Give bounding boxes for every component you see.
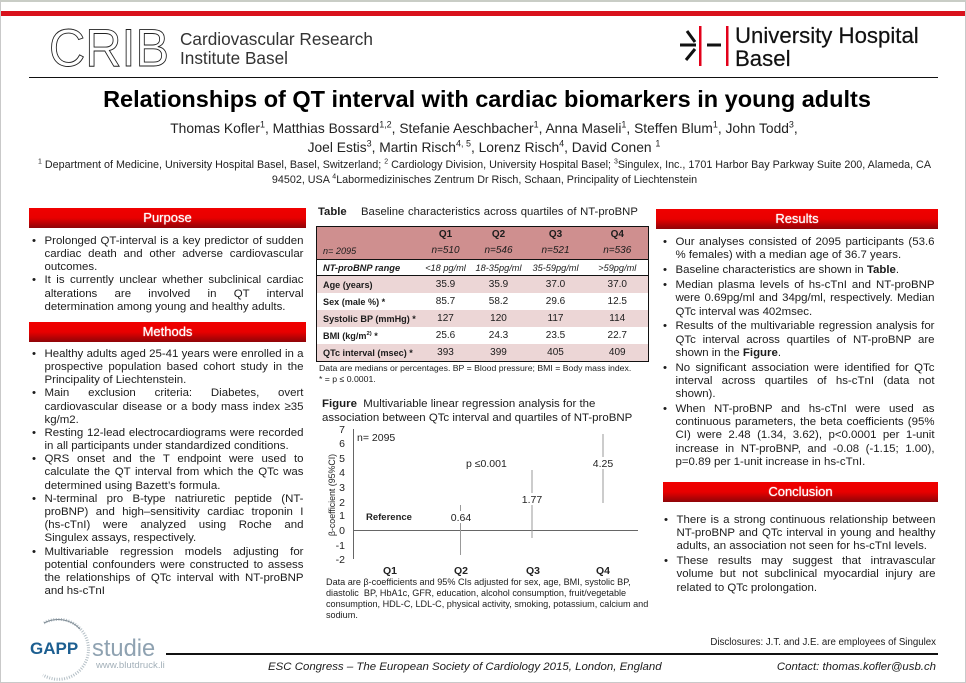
y tick labels: -2 [336,554,345,566]
chart: regression coefficients by quartile: 4.25 [593,458,613,470]
logo: GAPP studie [30,618,165,681]
table note: Data are medians or percentages. BP = Blood pressure; BMI = Body mass index. [319,363,631,373]
text: Conclusion: There is a strong continuous relationship between [676,514,936,526]
table: baseline characteristics: 120 [490,312,507,324]
table: baseline characteristics: Age (years) [323,280,373,290]
title: Relationships of QT interval with cardiac biomarkers in young adults [103,86,871,112]
heading: Methods: Methods [143,324,192,339]
figure note: diastolic BP, HbA1c, GFR, education, alcohol consumption, fruit/vegetable [326,588,626,598]
affiliations: 1 Department of Medicine, University Hospital Basel, Basel, Switzerland; 2 Cardiology Division, University Hospital Basel; 3Singulex, Inc., 1701 Harbor Bay Parkway Suite 200, Alameda, CA [38,158,931,171]
conference: ESC Congress – The European Society of Cardiology 2015, London, England [268,661,662,673]
logo: University Hospital Basel: University Hospital [735,23,919,48]
logo: University Hospital Basel [680,23,919,71]
y tick labels: 1 [339,510,345,522]
text: Purpose: outcomes. [44,261,97,273]
authors: Joel Estis3, Martin Risch4, 5, Lorenz Risch4, David Conen 1 [308,138,660,155]
authors [170,119,798,155]
table note [319,363,631,384]
text: Methods: Singulex assays, respectively. [44,532,196,544]
quartile labels: Q4 [596,565,610,577]
table: baseline characteristics: n=536 [603,245,631,256]
text: Methods: Resting 12-lead electrocardiograms were recorded [44,427,304,439]
table: baseline characteristics: 399 [490,346,507,358]
table: baseline characteristics: Q3 [549,229,562,240]
text: Methods: the relationships of QTc interval with NT-proBNP [44,572,304,584]
text: Methods [32,348,304,597]
text: Conclusion: adults, an association not seen for hs-cTnI levels. [676,540,927,552]
table caption: Table [318,206,347,218]
text: Results [663,236,934,468]
chart: regression coefficients by quartile [327,424,638,577]
table: baseline characteristics: >59pg/ml [598,262,636,272]
chart: regression coefficients by quartile: 1.77 [522,494,542,506]
quartile labels: Q3 [526,565,540,577]
text: Results: Baseline characteristics are shown in Table. [676,264,899,276]
header rule [29,77,938,78]
table note: * = p ≤ 0.0001. [319,374,376,384]
table: baseline characteristics: n= 2095 [323,246,356,256]
text: Methods: in all participants under standardized conditions. [44,440,289,452]
table: baseline characteristics: 114 [609,312,625,324]
text: Methods: QRS onset and the T endpoint were used to [44,453,304,465]
text: Results: Our analyses consisted of 2095 participants (53.6 [676,236,934,248]
table: baseline characteristics: 23.5 [546,330,565,340]
logo: CRIB Cardiovascular Research Institute Basel: Cardiovascular Research [180,29,373,49]
table: baseline characteristics: 85.7 [436,296,455,306]
text: Results: When NT-proBNP and hs-cTnI were used as [676,403,934,415]
footer rule [166,653,938,654]
text: Results: shown). [676,388,716,400]
table: baseline characteristics: 35-59pg/ml [533,262,578,272]
affiliations [38,158,931,186]
text: Purpose: It is currently unclear whether subclinical cardiac [44,274,304,286]
figure note: sodium. [326,610,358,620]
table: baseline characteristics: 127 [437,312,454,324]
text: Conclusion: NT-proBNP and QTc interval in young and healthy [676,527,936,539]
quartile labels: Q1 [383,565,397,577]
chart: regression coefficients by quartile: n= 2095 [357,432,395,444]
y tick labels: 2 [339,497,345,509]
text: Conclusion: These results may suggest that intravascular [676,555,936,567]
table: baseline characteristics: 393 [437,346,454,358]
figure note: consumption, HDL-C, LDL-C, physical activity, smoking, potassium, calcium and [326,599,648,609]
text: Results: QTc interval across quartiles of NT-proBNP are [676,334,934,346]
table: baseline characteristics: 37.0 [546,278,565,290]
heading: Purpose [29,208,306,228]
table: baseline characteristics: 24.3 [489,330,508,340]
text: Purpose: cardiac death and other adverse cardiovascular [44,248,304,260]
text: Results: were 0.69pg/ml and 34pg/ml, respectively. Median [676,292,934,304]
text: Results: continuous parameters, the beta coefficients (95% [676,416,934,428]
y tick labels: 4 [339,467,345,479]
table: baseline characteristics: 12.5 [608,296,627,306]
logo: GAPP studie: www.blutdruck.li [96,660,165,671]
table: baseline characteristics: 22.7 [608,330,627,340]
table: baseline characteristics: <18 pg/ml [425,262,466,272]
table: baseline characteristics: 117 [548,312,563,324]
table: baseline characteristics [316,226,649,362]
text: Conclusion: related to QTc prolongation. [676,582,817,594]
heading: Conclusion [663,482,938,502]
text: Results: No significant association were identified for QTc [676,362,934,374]
logo: University Hospital Basel: Basel [735,46,791,71]
table: baseline characteristics: QTc interval (msec) * [323,348,413,358]
heading: Results: Results [775,211,819,226]
figure note [326,577,648,620]
text: Methods: cardiovascular disease or a body mass index ≥35 [44,401,304,413]
quartile labels [383,565,610,577]
text: Methods: N-terminal pro B-type natriuretic peptide (NT- [44,493,304,505]
disclosures: Disclosures: J.T. and J.E. are employees of Singulex [710,637,936,648]
annotations [451,511,470,523]
text: Purpose: alterations are involved in QT interval [44,288,304,300]
text: Methods: Main exclusion criteria: Diabetes, overt [44,387,304,399]
table: baseline characteristics: n=546 [484,245,513,256]
table: baseline characteristics: BMI (kg/m2) * [323,330,378,340]
table: baseline characteristics: 35.9 [489,278,508,290]
figure caption: association between QTc interval and quartiles of NT-proBNP [322,412,632,424]
chart: regression coefficients by quartile: Reference [366,512,412,523]
text: Methods: Healthy adults aged 25-41 years were enrolled in a [44,348,304,360]
confidence intervals [460,434,603,555]
y axis [353,429,638,559]
heading: Methods [29,322,306,342]
table: baseline characteristics: n=510 [431,245,460,256]
text: Results: % females) with a median age of 36.7 years. [676,249,901,261]
figure caption: Figure Multivariable linear regression analysis for the [322,398,595,410]
y tick labels: 3 [339,482,345,494]
y tick labels [336,424,345,566]
text: Methods: potential confounders were constructed to assess [44,559,304,571]
text: Results: CI) were 2.48 (1.34, 3.62), p<0.0001 per 1-unit [676,429,934,441]
logo: GAPP studie: GAPP [30,639,78,658]
table: baseline characteristics: 58.2 [489,296,508,306]
quartile labels: Q2 [454,565,468,577]
text: Purpose: determination among young and healthy adults. [44,301,286,313]
text: Results: Median plasma levels of hs-cTnI and NT-proBNP [676,279,934,291]
text: Results: shown in the Figure. [676,347,781,359]
y tick labels: 7 [339,424,345,436]
figure caption [322,398,632,424]
text: Results: increase in NT-proBNP, and -0.08 (-1.15; 1.00), [676,443,934,455]
text: Methods: proBNP) and high–sensitivity cardiac troponin I [44,506,304,518]
text: Methods: determined using Bazett’s formula. [44,480,220,492]
text: Methods: and hs-cTnI [44,585,105,597]
table: baseline characteristics: Q2 [492,229,505,240]
text: Results: interval across quartiles of hs-cTnI (data not [676,375,934,387]
table: baseline characteristics: Systolic BP (mmHg) * [323,314,416,324]
text: Methods: Multivariable regression models adjusting for [44,546,304,558]
text: Results: QTc interval was 402msec. [676,306,812,318]
table: baseline characteristics: Sex (male %) * [323,296,385,306]
text: Methods: Principality of Liechtenstein. [44,374,186,386]
heading: Results [656,209,938,229]
text: Purpose: Prolonged QT-interval is a key predictor of sudden [44,235,304,247]
table: baseline characteristics: 29.6 [546,296,565,306]
y tick labels: 6 [339,438,345,450]
text: Methods: kg/m2. [44,414,79,426]
logo: GAPP studie: studie [92,636,155,662]
y axis title: β-coefficient (95%CI) [327,454,337,536]
table: baseline characteristics: 37.0 [608,278,627,290]
logo: CRIB Cardiovascular Research Institute Basel [49,26,373,70]
text: Conclusion: volume but not subclinical myocardial injury are [676,568,936,580]
table caption: Baseline characteristics across quartiles of NT-proBNP [361,206,638,218]
table: baseline characteristics: Q4 [611,229,624,240]
authors: Thomas Kofler1, Matthias Bossard1,2, Stefanie Aeschbacher1, Anna Maseli1, Steffen Blum1, John Todd3, [170,119,798,136]
affiliations: 94502, USA 4Labormedizinisches Zentrum Dr Risch, Schaan, Principality of Liechtenstein [272,173,697,186]
logo: CRIB Cardiovascular Research Institute Basel: Institute Basel [180,48,288,68]
text: Purpose [32,235,304,313]
heading: Conclusion: Conclusion [768,484,833,499]
table: baseline characteristics: 18-35pg/ml [476,262,521,272]
y tick labels: -1 [336,540,345,552]
text: Methods: (hs-cTnI) were analyzed using Roche and [44,519,304,531]
table: baseline characteristics: NT-proBNP range [323,262,400,272]
text: Methods: calculate the QT interval from which the QTc was [44,466,304,478]
top red bar [1,11,965,16]
table: baseline characteristics: 405 [547,346,564,358]
y tick labels: 5 [339,453,345,465]
contact: Contact: thomas.kofler@usb.ch [777,661,936,673]
table: baseline characteristics: 25.6 [436,330,455,340]
table: baseline characteristics: Q1 [439,229,452,240]
text: Results: p=0.89 per 1-unit increase in hs-cTnI. [676,456,865,468]
figure note: Data are β-coefficients and 95% CIs adjusted for sex, age, BMI, systolic BP, [326,577,631,587]
heading: Purpose: Purpose [143,210,192,225]
chart: regression coefficients by quartile: 0.64 [451,512,471,524]
text: Results: Results of the multivariable regression analysis for [676,320,934,332]
y tick labels: 0 [339,525,345,537]
text: Methods: prospective population based cohort study in the [44,361,304,373]
table: baseline characteristics: 409 [609,346,626,358]
table: baseline characteristics: 35.9 [436,278,455,290]
chart: regression coefficients by quartile: p ≤0.001 [466,458,507,470]
text: Conclusion [664,514,936,594]
table: baseline characteristics: n=521 [541,245,570,256]
